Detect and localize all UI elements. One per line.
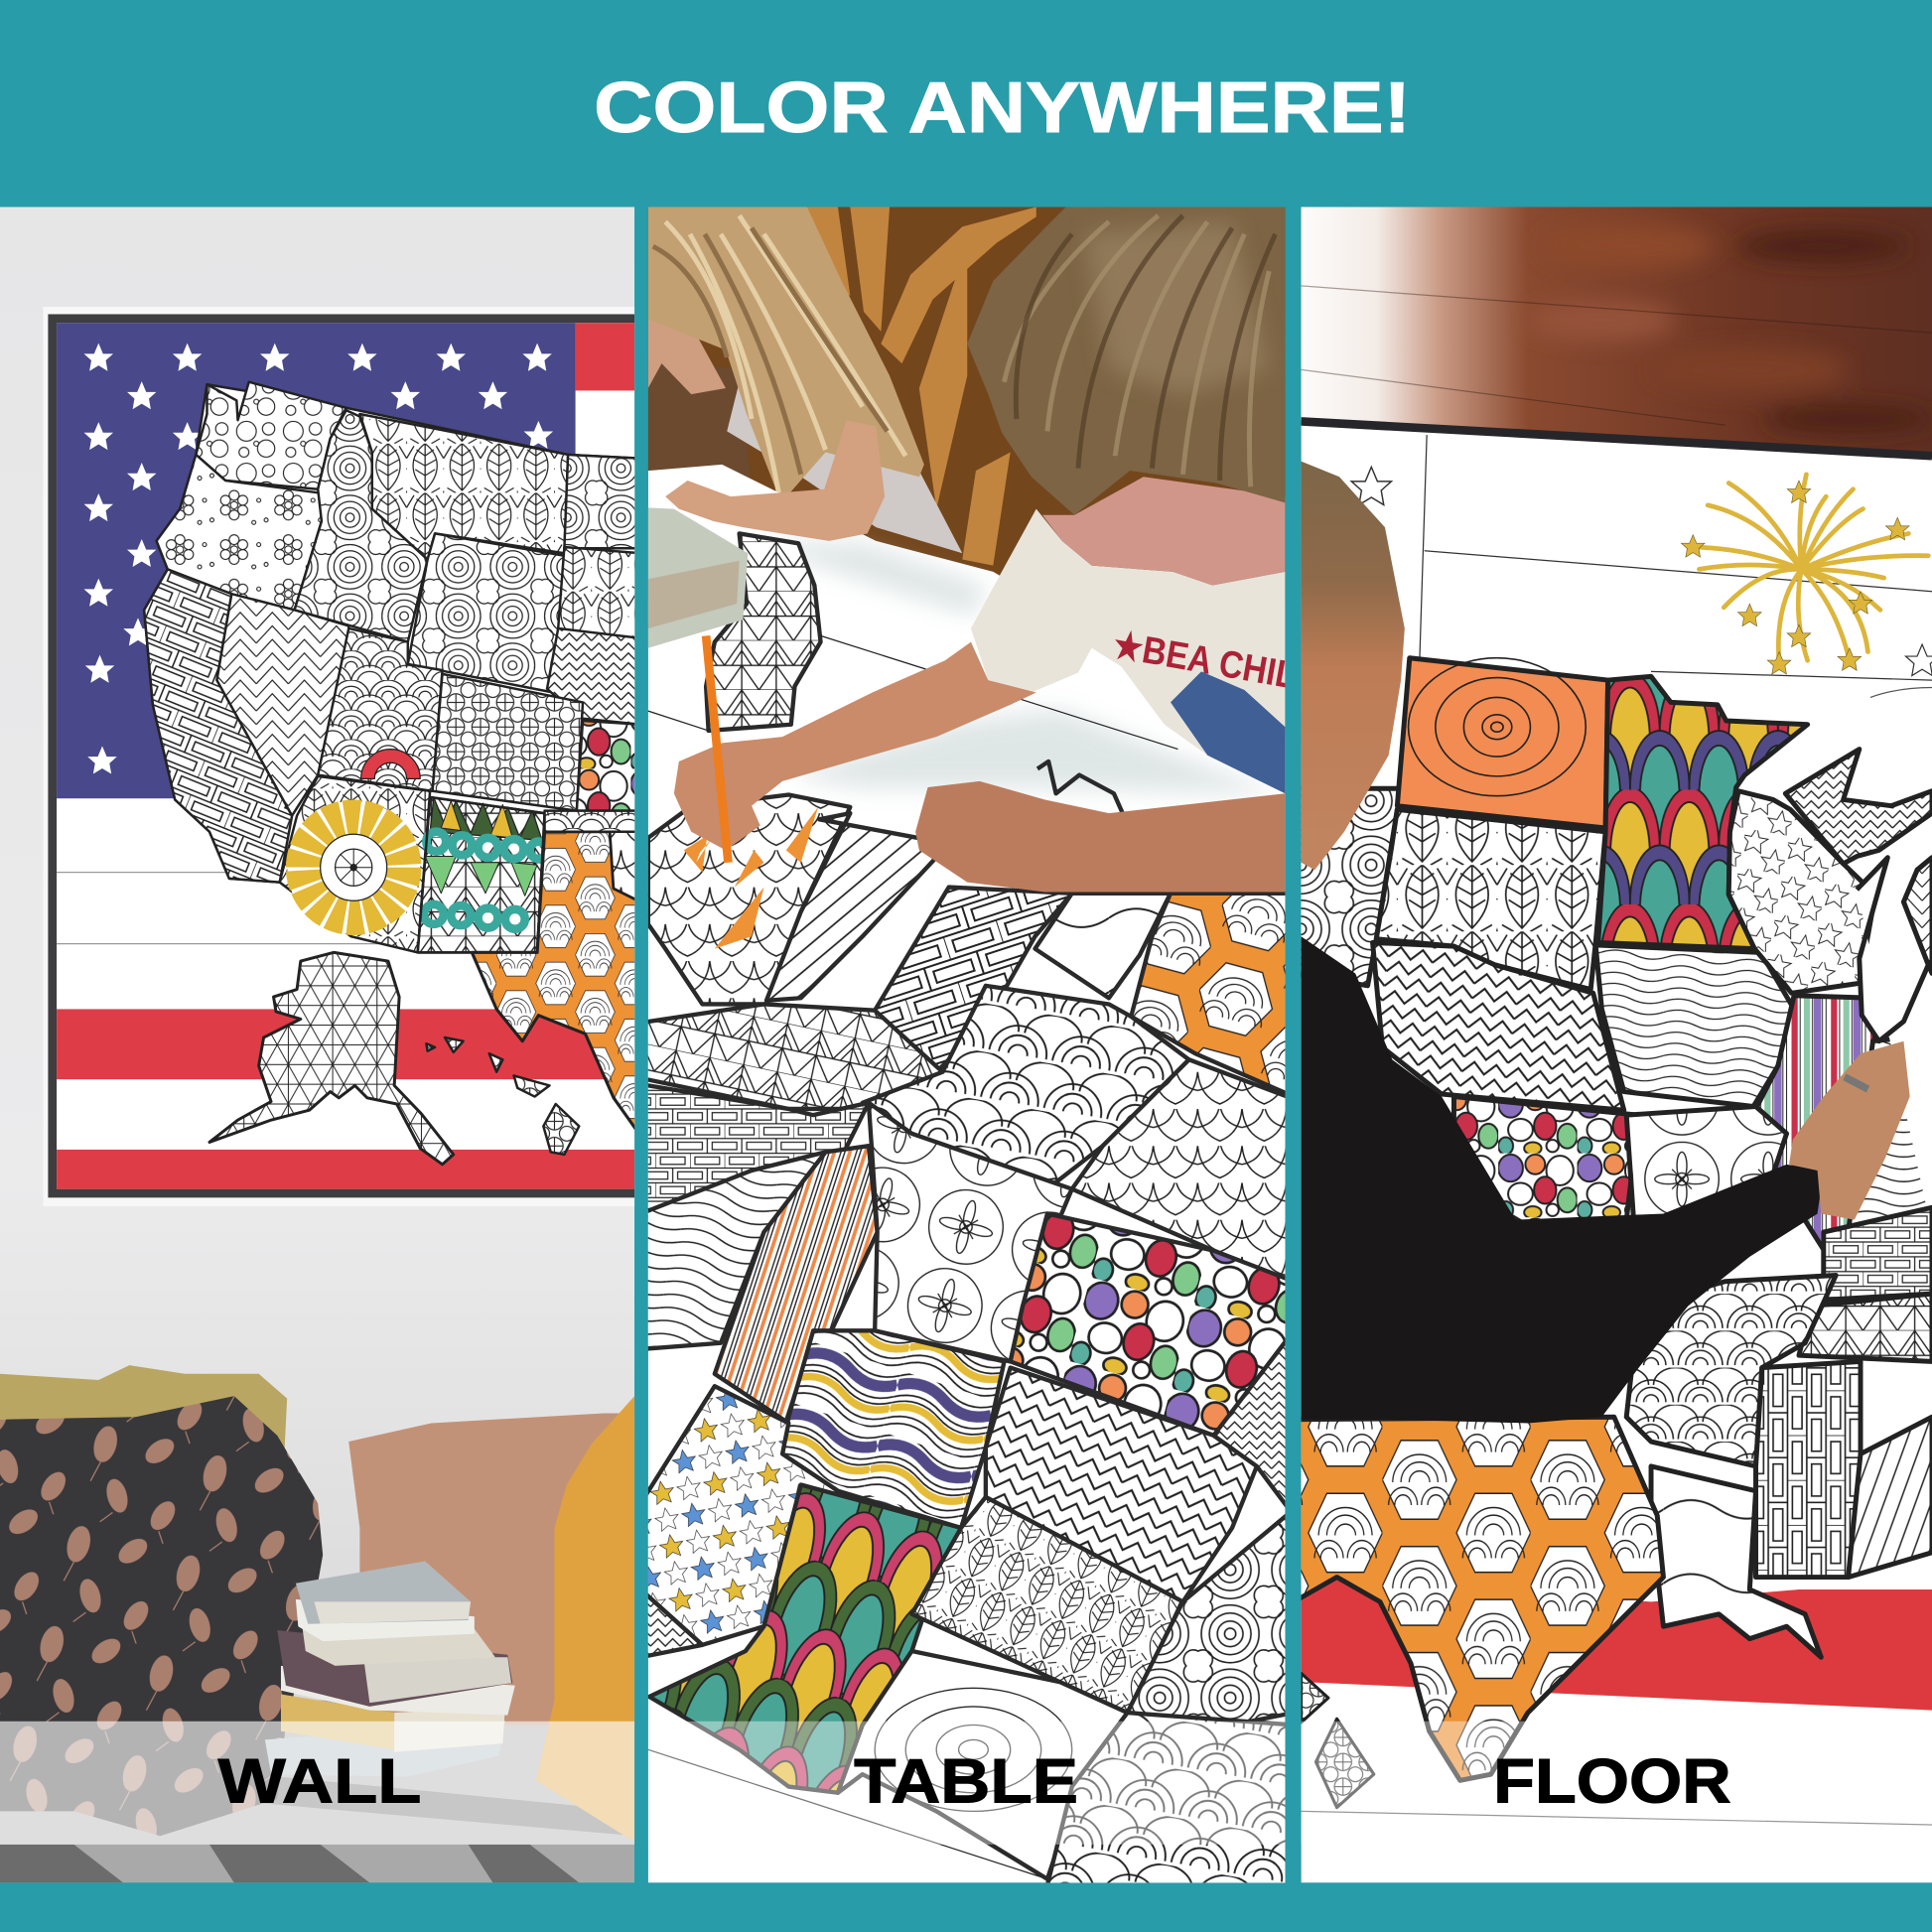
- state: left spirals: [1294, 788, 1405, 986]
- pencil: [706, 635, 728, 863]
- state: Washington circles: [196, 382, 346, 489]
- lake outline: [1857, 858, 1932, 1232]
- zentangle US map states: [640, 794, 1294, 1885]
- state: leaf arcs: [1047, 1713, 1294, 1885]
- state: California bricks: [144, 569, 292, 883]
- marker: [1845, 1077, 1867, 1089]
- state: Louisiana waves: [1651, 1466, 1821, 1657]
- state: scalloped right: [1849, 1035, 1932, 1232]
- state: stars: [1728, 791, 1875, 993]
- flag lines: [648, 635, 1177, 1879]
- boy's face: [1042, 477, 1285, 586]
- boy's arm and hand holding pencil: [674, 642, 1036, 850]
- state: Colorado petals: [433, 674, 583, 811]
- state: Arizona with sunflower: [280, 776, 430, 952]
- caption band: [648, 1722, 1285, 1845]
- state: Montana leaves: [359, 414, 568, 559]
- state: spirals: [1128, 1509, 1294, 1725]
- state: New Mexico teal rings and triangles: [418, 797, 547, 952]
- boy's second arm and hand: [915, 781, 1285, 893]
- state: bricks: [875, 888, 1072, 1072]
- state: Wyoming spirals: [408, 533, 564, 692]
- state: coloured scales: [649, 1484, 961, 1793]
- state: fish scales: [1072, 1059, 1294, 1284]
- state: scalloped rows: [640, 1152, 826, 1349]
- state: right stripes: [1849, 1417, 1932, 1578]
- floor: [0, 1701, 634, 1882]
- map top: state outline with triangles: [706, 533, 821, 731]
- state: arcs with orange: [648, 794, 850, 1004]
- lake shoreline: [1857, 858, 1932, 1041]
- crayon box: [648, 507, 748, 648]
- red flag stripe: [1302, 1578, 1932, 1711]
- title: COLOR ANYWHERE!: [594, 69, 1411, 148]
- yellow blanket in basket: [0, 1365, 288, 1448]
- state: Nebraska zigzag: [547, 628, 640, 725]
- flag stars: [84, 344, 553, 774]
- person's black sleeve: [1302, 936, 1824, 1423]
- state: lower peninsula stripes: [1903, 858, 1932, 973]
- caption band: [0, 1722, 634, 1845]
- state: waves: [1035, 894, 1171, 998]
- panel: floor: [1294, 207, 1932, 1882]
- girl's arm: [665, 420, 885, 541]
- state: right edge: [1213, 1330, 1294, 1516]
- person's head: [1300, 461, 1405, 870]
- wooden chairs: [807, 207, 1036, 566]
- state: coloured stars: [640, 1386, 838, 1645]
- mustard chair: [536, 1396, 634, 1842]
- line: [1302, 1811, 1932, 1825]
- table surface: [648, 465, 1285, 1882]
- icon: firework: [1681, 475, 1928, 674]
- flag poster: [57, 323, 634, 1189]
- state: Kansas pebbles: [577, 721, 640, 811]
- state: coloured pebbles: [1011, 1213, 1294, 1436]
- state: pebbles: [1453, 1097, 1639, 1226]
- person's hand: [1789, 1041, 1910, 1220]
- pillow: [348, 1414, 634, 1725]
- state: zigzag: [1373, 942, 1624, 1110]
- shirt figure: [1171, 671, 1285, 793]
- state: zigzag: [986, 1368, 1257, 1601]
- girl's face: [648, 319, 726, 394]
- patterned basket: [0, 1396, 323, 1836]
- state: orange stripes: [715, 1146, 878, 1423]
- flag lines: [1420, 435, 1932, 680]
- Hawaiian islands: [426, 1037, 579, 1155]
- state: North Dakota: [564, 455, 640, 548]
- boy's hair: [967, 207, 1285, 515]
- caption: table: TABLE: [854, 1747, 1078, 1817]
- map silhouette base: [144, 384, 640, 1136]
- state: bricks upper: [1824, 1207, 1932, 1300]
- wood floor: [1302, 207, 1932, 459]
- US map states: [1294, 658, 1932, 1808]
- state: orange spiral: [1397, 658, 1608, 828]
- state: coloured scallops: [1598, 676, 1808, 949]
- state: Oklahoma band: [545, 811, 640, 832]
- state: bricks left: [640, 1084, 869, 1220]
- caption: floor: FLOOR: [1493, 1747, 1731, 1817]
- stack of books: [265, 1561, 515, 1777]
- girl's hair: [648, 207, 924, 502]
- state: left zigzag: [640, 1589, 702, 1657]
- poster mat: [43, 307, 634, 1206]
- state: coloured stripes: [1756, 996, 1875, 1269]
- state: Texas orange honeycomb: [1294, 1417, 1663, 1780]
- soft shadows: [752, 542, 1282, 918]
- state: Arkansas scales: [610, 832, 640, 901]
- state: rainbow arcs: [863, 986, 1189, 1189]
- state: orange honeycomb: [1131, 894, 1294, 1097]
- state: purple and yellow waves: [782, 1330, 1004, 1528]
- caption band: [1302, 1722, 1932, 1845]
- state: Oregon flowers: [157, 455, 322, 610]
- poster frame: [48, 314, 634, 1197]
- state: flower circles: [869, 1103, 1072, 1361]
- state: waves: [1595, 945, 1794, 1106]
- icon: sunflower: [287, 801, 420, 934]
- state: Utah scallops with red arch: [318, 628, 443, 791]
- state: concentric rings: [838, 1651, 1128, 1879]
- state: bricks lower: [1756, 1361, 1861, 1578]
- room background: [648, 207, 1285, 602]
- coloured US map on the poster: [144, 382, 640, 1165]
- state: flowers: [1626, 1106, 1787, 1294]
- state: Nevada chevrons: [216, 594, 348, 816]
- state: triangle band: [640, 1004, 942, 1109]
- Hawaiian island: [1315, 1719, 1374, 1808]
- state: Alaska: [209, 952, 454, 1165]
- shirt text: ★BEA CHIL: [1110, 623, 1300, 698]
- girl dark shadow: [648, 357, 752, 505]
- caption: wall: WALL: [218, 1747, 421, 1817]
- state: upper peninsula zigzag: [1785, 750, 1932, 864]
- small star and streak: [1870, 644, 1932, 697]
- small island: [1302, 1673, 1328, 1723]
- state: Idaho spirals: [295, 410, 428, 642]
- poster top edge: [1302, 421, 1932, 456]
- panel: table: [640, 207, 1300, 1885]
- girl's dress: [727, 349, 962, 553]
- state: Texas orange honeycomb: [472, 832, 640, 1136]
- state: triangle band: [1799, 1294, 1932, 1361]
- boy's shirt: [971, 509, 1285, 793]
- map outline: small state: [1037, 761, 1124, 816]
- panel: wall: [0, 207, 640, 1882]
- state: leaves: [1376, 809, 1605, 990]
- white paper: [1302, 207, 1932, 1882]
- outlined star: [1351, 467, 1391, 505]
- state: South Dakota: [558, 547, 640, 642]
- state: arcs: [1626, 1276, 1836, 1466]
- state: leaves: [911, 1497, 1182, 1713]
- state: diagonal stripes: [766, 813, 949, 1001]
